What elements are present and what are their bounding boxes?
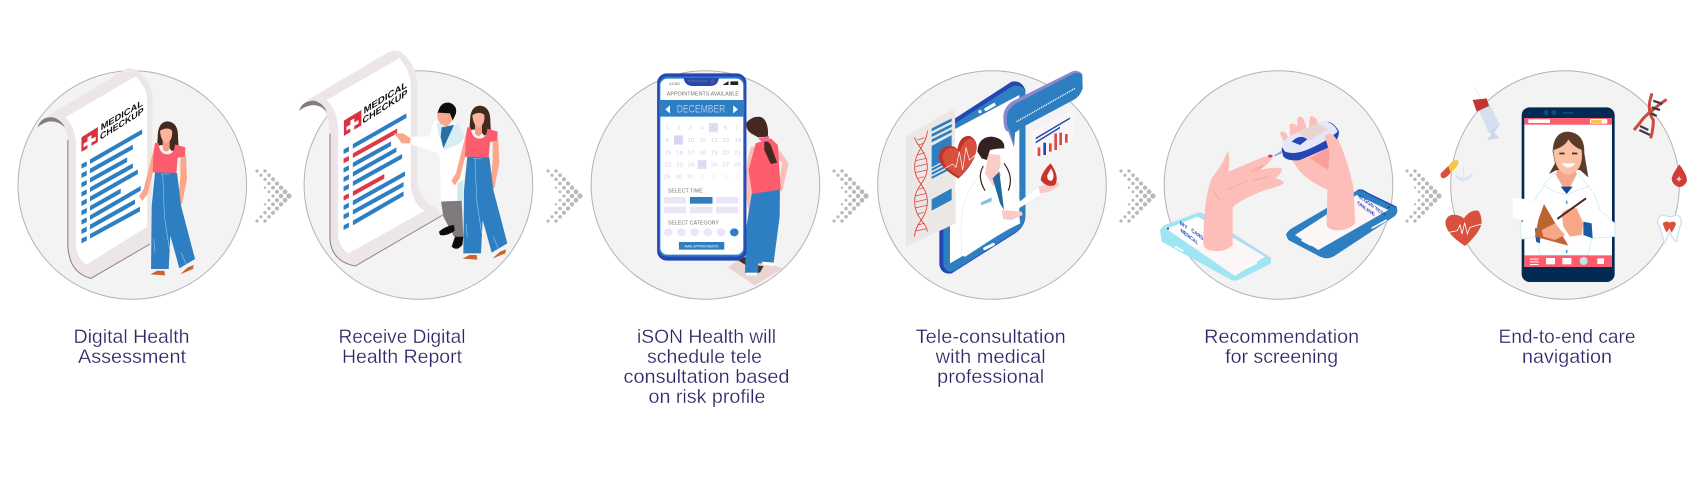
caption 2 xyxy=(338,326,466,368)
calendar numbers: 23 xyxy=(676,163,683,169)
circle backdrop 2 xyxy=(304,71,533,299)
calendar numbers: 10 xyxy=(687,138,695,144)
icon: syringe xyxy=(1473,87,1500,140)
glucometer xyxy=(1268,121,1339,160)
caption 2: Health Report xyxy=(342,346,463,368)
heading: medical checkup: MEDICAL xyxy=(101,98,143,133)
calendar numbers xyxy=(664,126,742,181)
caption 3: consultation based xyxy=(624,366,790,388)
paper face xyxy=(65,77,147,264)
calendar numbers: 18 xyxy=(699,150,706,156)
my medical card label: CARD xyxy=(1191,227,1204,243)
calendar numbers: 5 xyxy=(712,126,716,132)
circle backdrop 3 xyxy=(591,71,820,299)
paper sheet xyxy=(306,50,443,266)
calendar numbers: 12 xyxy=(711,138,718,144)
time slots xyxy=(664,197,738,213)
bottom nav bar xyxy=(1524,255,1612,267)
caption 1 xyxy=(74,326,190,368)
calendar numbers: 2 xyxy=(712,175,715,181)
finger creases xyxy=(1213,165,1270,200)
heart with ECG xyxy=(938,136,977,179)
left hand xyxy=(1203,152,1284,251)
caption 6: navigation xyxy=(1522,346,1612,368)
report lines with red highlights xyxy=(344,113,406,230)
calendar numbers: 3 xyxy=(724,175,727,181)
caption 4 xyxy=(916,326,1066,388)
report card with bars xyxy=(1032,110,1073,162)
arrow: chevron 3 xyxy=(832,169,869,223)
caption 6 xyxy=(1498,326,1636,368)
illustration: report xyxy=(299,50,443,266)
button xyxy=(679,242,724,250)
woman figure xyxy=(139,121,195,275)
illustration: doctor on phone with medical icons xyxy=(1441,87,1687,282)
select time heading: SELECT TIME xyxy=(668,189,703,195)
light phone xyxy=(1160,213,1271,281)
calendar numbers: 16 xyxy=(676,150,683,156)
caption 3: schedule tele xyxy=(647,346,762,368)
icon: capsule xyxy=(1441,160,1459,178)
paper shadow edge xyxy=(330,133,443,266)
month band xyxy=(659,100,744,117)
calendar numbers: 4 xyxy=(735,175,739,181)
illustration: calendar phone and woman on scale xyxy=(657,73,789,285)
calendar numbers: 31 xyxy=(687,175,694,181)
calendar numbers: 2 xyxy=(677,126,681,132)
doctor xyxy=(961,137,1059,257)
top bar xyxy=(1524,118,1612,125)
calendar numbers: 24 xyxy=(688,163,695,169)
illustration: hands, glucometer and phones xyxy=(1160,116,1397,281)
phone body xyxy=(657,73,746,261)
calendar numbers: 4 xyxy=(700,126,705,132)
phone camera dots xyxy=(1543,110,1573,115)
caption 5: Recommendation xyxy=(1204,326,1359,348)
screen title: APPOINTMENTS AVAILABLE xyxy=(667,92,739,98)
tablet body xyxy=(939,81,1025,274)
calendar numbers: 29 xyxy=(664,175,671,181)
calendar numbers: 1 xyxy=(700,175,704,181)
calendar numbers: 8 xyxy=(665,138,669,144)
report lines xyxy=(81,129,142,243)
calendar numbers: 20 xyxy=(722,150,730,156)
calendar numbers: 7 xyxy=(735,126,738,132)
panel: step 5 recommendation for screening xyxy=(1160,71,1397,368)
panel: step 2 receive digital health report xyxy=(299,50,533,368)
woman figure xyxy=(451,106,507,260)
category dots xyxy=(664,228,739,236)
calendar numbers: 26 xyxy=(711,163,718,169)
calendar numbers: 1 xyxy=(665,126,669,132)
panel: step 3 schedule tele consultation xyxy=(591,71,820,408)
icon: tooth xyxy=(1657,215,1681,243)
right hand xyxy=(1280,116,1355,230)
calendar numbers: 13 xyxy=(722,138,729,144)
my medical card label: MEDICAL xyxy=(1181,228,1198,247)
doctor woman xyxy=(1513,132,1615,255)
phone inner frame xyxy=(659,77,744,257)
calendar numbers: 28 xyxy=(734,163,741,169)
paper curl xyxy=(299,101,327,112)
caption 3 xyxy=(624,326,790,408)
circle backdrop 1 xyxy=(18,71,247,299)
calendar numbers: 25 xyxy=(699,163,707,169)
caption 6: End-to-end care xyxy=(1498,326,1636,348)
caption 1: Digital Health xyxy=(74,326,190,348)
paper sheet xyxy=(46,68,152,278)
caption 4: Tele-consultation xyxy=(916,326,1066,348)
icon: heart with ECG xyxy=(1445,210,1482,246)
arrow: chevron 1 xyxy=(255,169,292,223)
status time: 13:00 xyxy=(669,81,680,86)
heading: medical checkup: CHECKUP xyxy=(362,88,407,127)
caption 5 xyxy=(1204,326,1359,368)
panel: step 1 digital health assessment xyxy=(18,68,247,368)
blood drop xyxy=(1041,163,1057,186)
phone screen xyxy=(1524,118,1612,267)
calendar numbers: 9 xyxy=(677,138,681,144)
icon: pale pill xyxy=(1456,167,1472,181)
icon: blood drop xyxy=(1672,164,1687,187)
caption 1: Assessment xyxy=(78,346,187,368)
blood test online label: BLOOD TEST xyxy=(1358,194,1386,219)
panel blue text lines xyxy=(932,118,952,211)
speech bubble xyxy=(1003,71,1083,147)
month band: DECEMBER xyxy=(677,104,725,116)
DNA helix xyxy=(915,131,927,237)
panel: step 6 end-to-end care navigation xyxy=(1441,71,1687,368)
calendar numbers: 17 xyxy=(688,150,694,156)
calendar numbers: 11 xyxy=(699,138,706,144)
paper face xyxy=(327,58,425,253)
calendar numbers: 27 xyxy=(722,163,729,169)
doctor and woman figures xyxy=(393,103,507,260)
woman from behind xyxy=(745,117,789,275)
paper curl xyxy=(37,117,65,127)
dark blue phone xyxy=(1286,190,1397,258)
panel: step 4 tele-consultation xyxy=(878,71,1106,388)
caption 5: for screening xyxy=(1225,346,1338,368)
button: AVAIL APPOINTMENTS xyxy=(684,244,719,248)
arrow: chevron 2 xyxy=(546,169,583,223)
circle backdrop 5 xyxy=(1164,71,1393,299)
doctor figure xyxy=(393,103,465,249)
calendar numbers: 3 xyxy=(689,126,692,132)
phone notch xyxy=(684,78,738,86)
calendar numbers: 21 xyxy=(734,150,741,156)
blood test online label: ONLINE xyxy=(1357,200,1375,218)
calendar numbers: 22 xyxy=(664,163,671,169)
phone screen xyxy=(660,79,743,255)
caption 4: professional xyxy=(937,366,1044,388)
drop highlight xyxy=(1047,168,1053,181)
arrow: chevron 4 xyxy=(1119,169,1156,223)
hand shade xyxy=(1310,147,1330,170)
paper shadow edge xyxy=(68,140,150,278)
select category heading: SELECT CATEGORY xyxy=(668,221,719,227)
heading: medical checkup: CHECKUP xyxy=(100,106,144,143)
logo: red cross xyxy=(344,110,361,136)
weighing scale xyxy=(728,257,783,285)
calendar numbers: 15 xyxy=(664,150,672,156)
calendar numbers: 14 xyxy=(734,138,742,144)
my medical card label xyxy=(1180,220,1204,247)
calendar numbers: 19 xyxy=(711,150,718,156)
calendar numbers: 6 xyxy=(724,126,727,132)
illustration: medical checkup paper xyxy=(37,68,152,278)
calendar highlights xyxy=(674,123,718,169)
illustration: doctor in tablet xyxy=(906,71,1083,274)
caption 3: iSON Health will xyxy=(637,326,776,348)
logo: red cross xyxy=(81,127,98,152)
caption 4: with medical xyxy=(935,346,1046,368)
info panel xyxy=(906,108,956,247)
caption 2: Receive Digital xyxy=(338,326,466,348)
calendar numbers: 30 xyxy=(676,175,683,181)
icon: DNA xyxy=(1634,93,1667,138)
my medical card label: MY xyxy=(1180,220,1188,232)
caption 3: on risk profile xyxy=(648,386,766,408)
phone body xyxy=(1522,107,1615,282)
heading: medical checkup: MEDICAL xyxy=(364,79,408,117)
arrow: chevron 5 xyxy=(1405,169,1442,223)
circle backdrop 6 xyxy=(1451,71,1679,299)
circle backdrop 4 xyxy=(878,71,1106,299)
